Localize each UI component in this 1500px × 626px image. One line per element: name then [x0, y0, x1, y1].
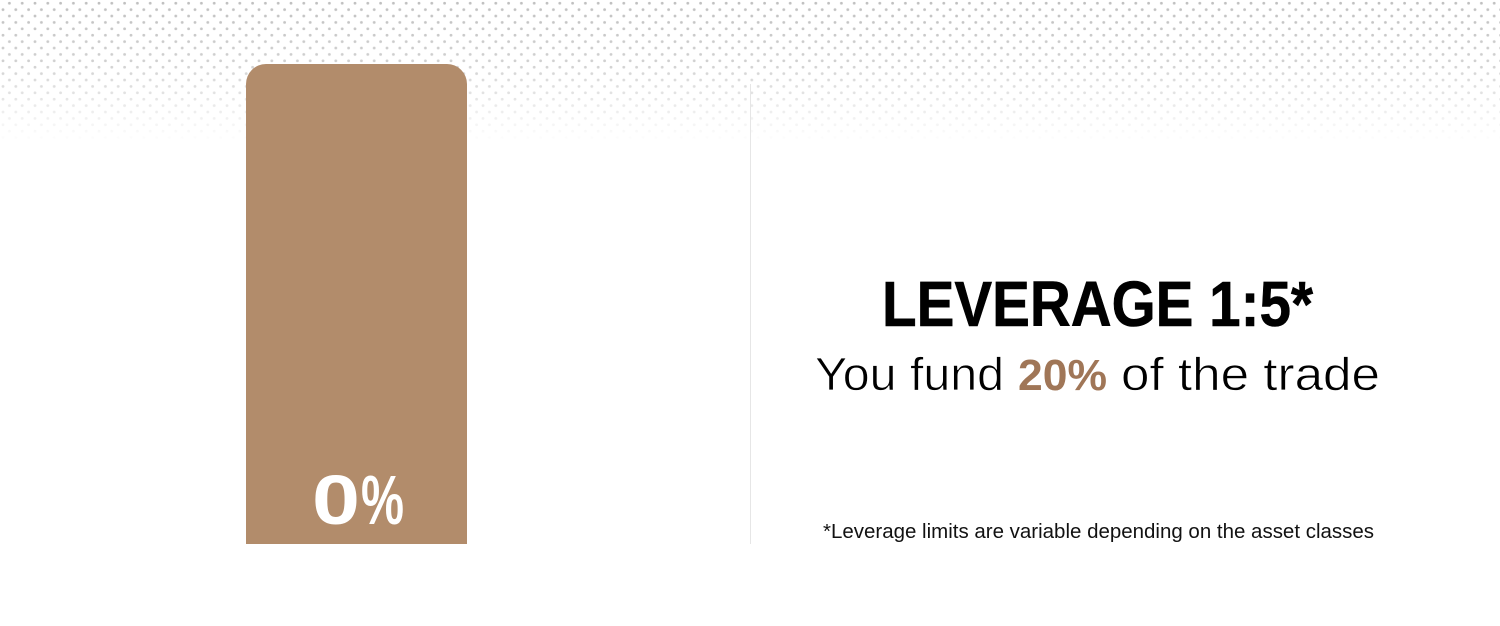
- bar value label: 0: [312, 461, 360, 539]
- heading: LEVERAGE 1:5*: [882, 268, 1313, 340]
- subheading: of the trade: [1121, 348, 1380, 400]
- vertical divider: [750, 84, 751, 544]
- bar: funded portion: [246, 64, 467, 544]
- footnote: *Leverage limits are variable depending on the asset classes: [823, 521, 1374, 543]
- subheading: You fund: [815, 348, 1004, 400]
- bar value label: [312, 461, 404, 539]
- bar value label: %: [361, 461, 404, 539]
- subheading: [815, 348, 1380, 400]
- subheading: 20%: [1018, 351, 1107, 400]
- dotted background pattern: [2, 2, 1500, 126]
